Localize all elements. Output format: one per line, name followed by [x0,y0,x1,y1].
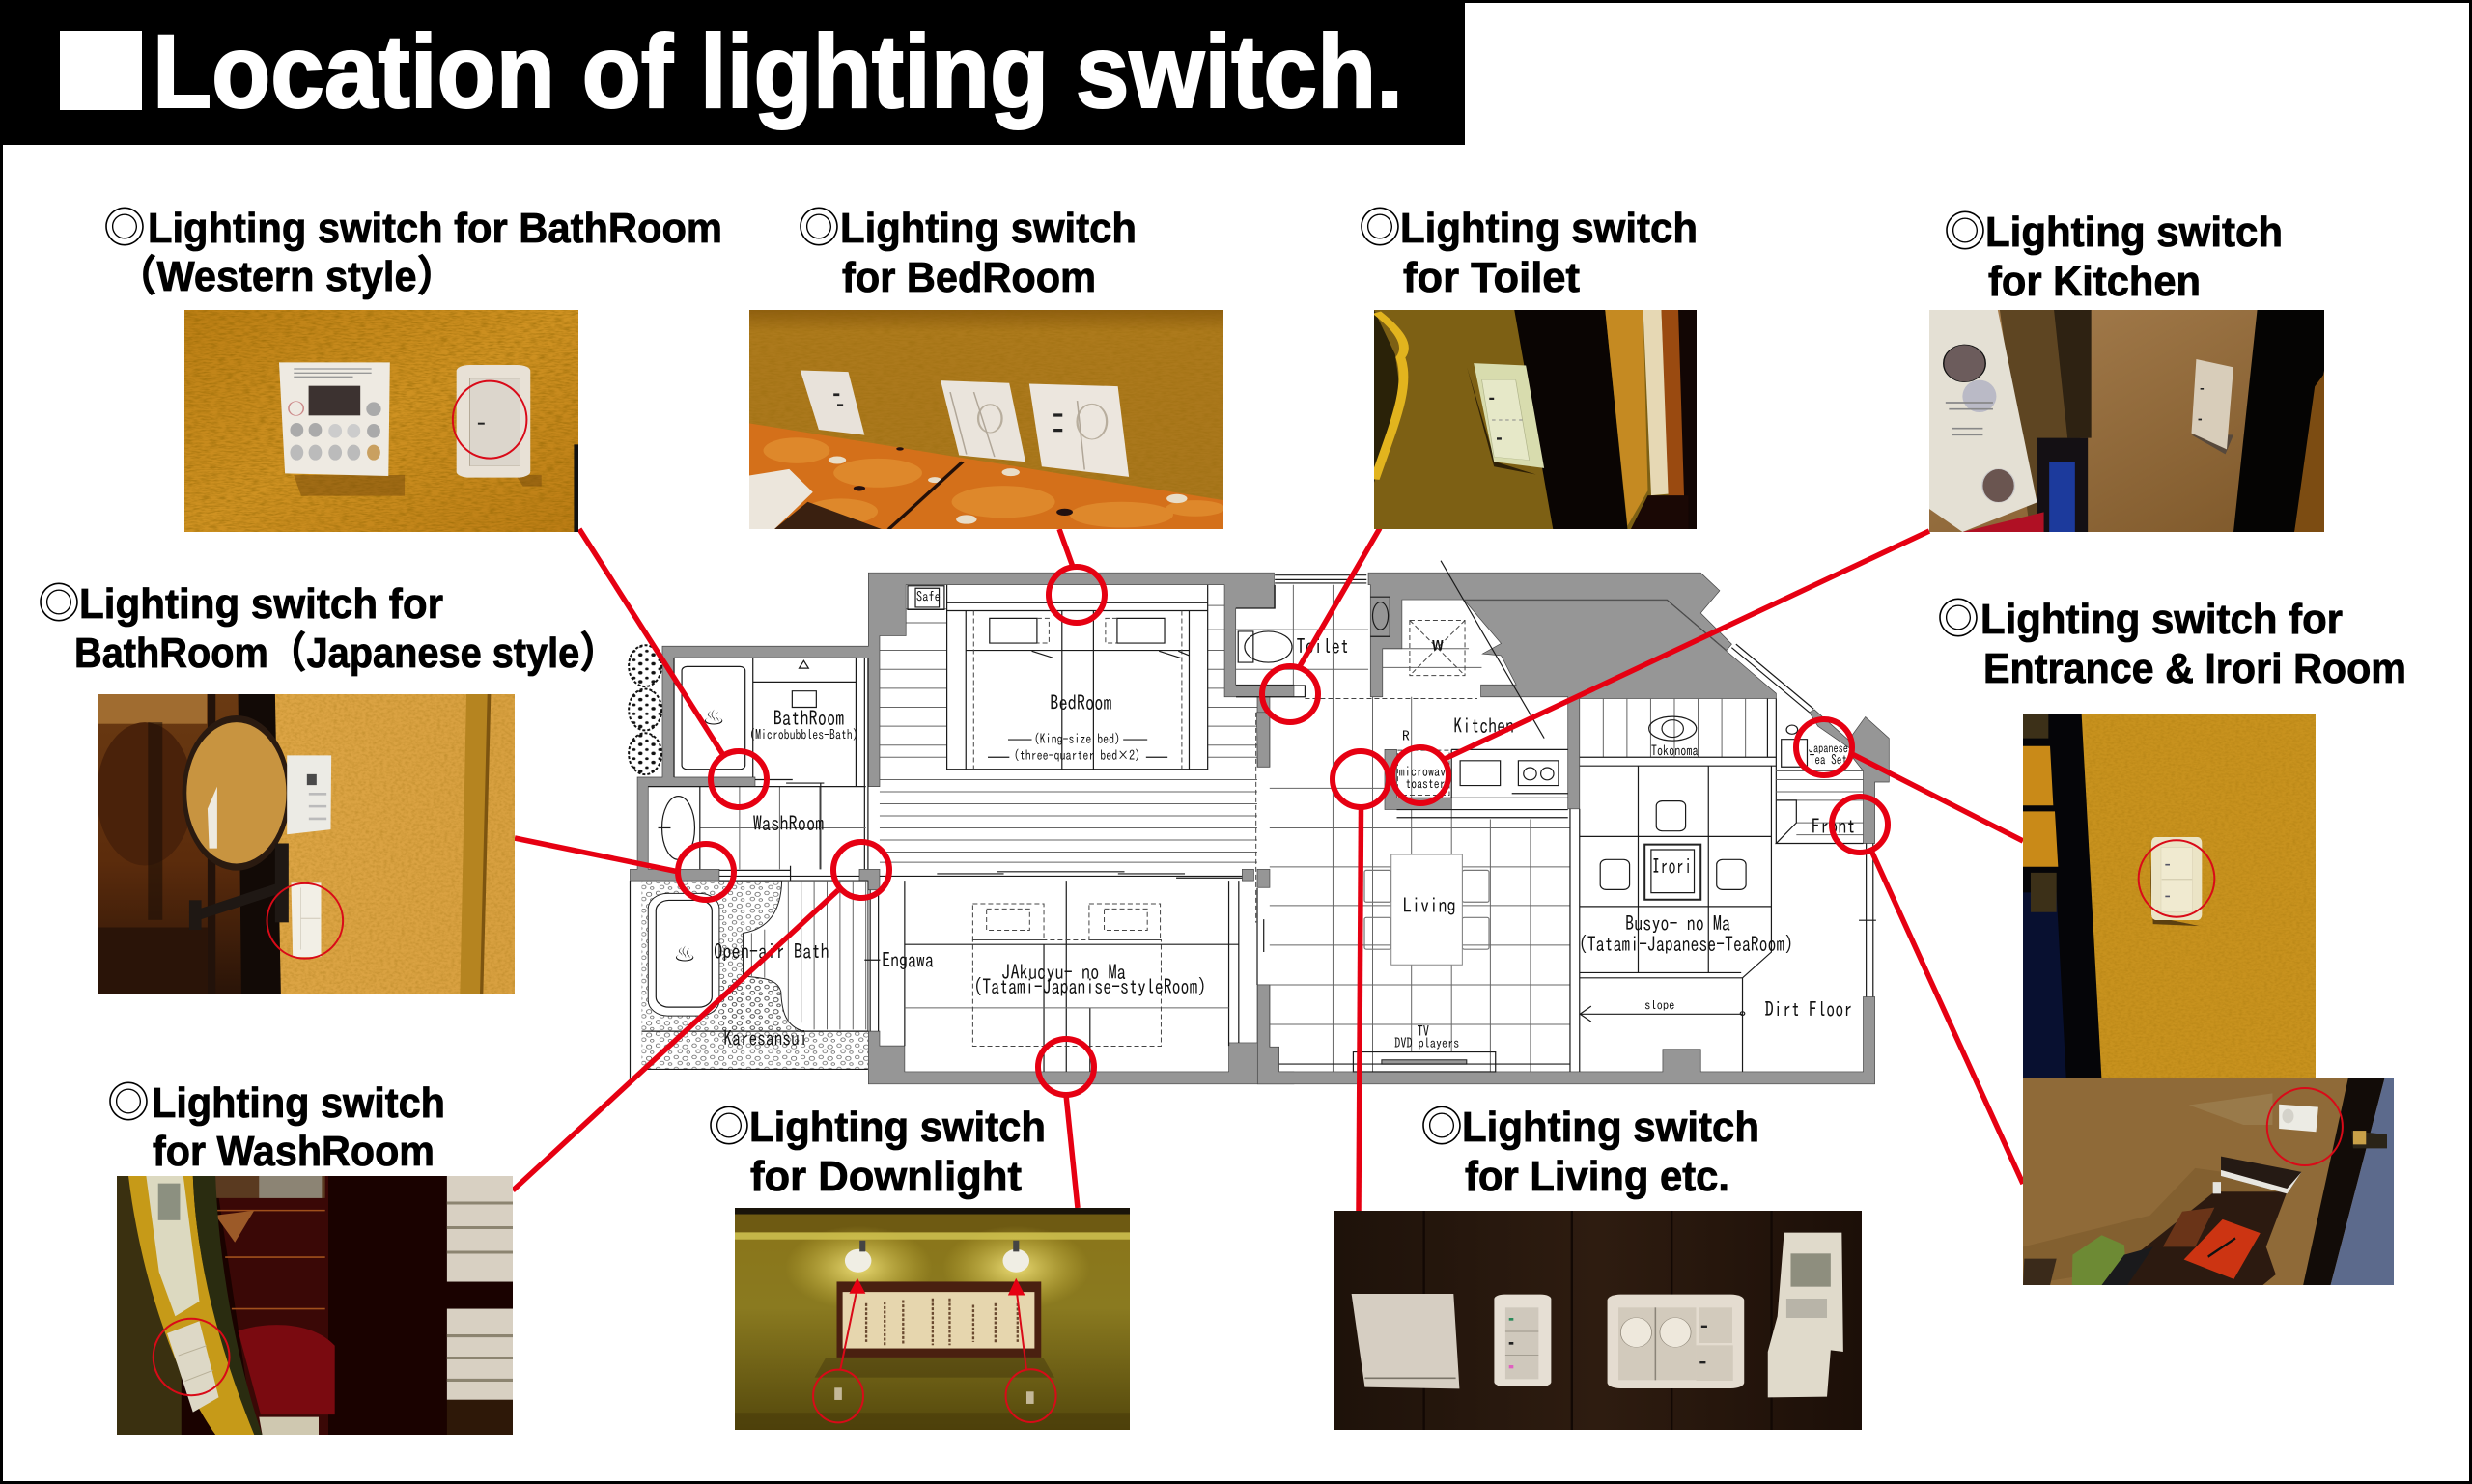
photo: bathroom western switch [184,310,578,532]
toilet room [1236,585,1477,699]
bedroom furniture [908,585,1208,770]
heading: bathroom western [103,193,722,300]
photo: toilet switch [1374,310,1697,529]
tea room: Irori [1652,855,1692,877]
red callout lines [513,528,2023,1211]
bedroom labels: (King-size bed) [1034,732,1120,745]
heading: kitchen: for Kitchen [1988,258,2201,305]
heading: toilet [1359,193,1698,301]
heading: washroom: Lighting switch [152,1079,445,1127]
TV stand: TV [1417,1023,1429,1038]
heading: living [1420,1092,1759,1200]
heading: bathroom japanese: Lighting switch for [79,580,443,628]
bathroom [674,658,868,869]
kitchen: toaster [1405,776,1446,790]
wooden shelf [2023,1157,2302,1285]
heading: living: Lighting switch [1462,1104,1759,1151]
triple switch [1494,1295,1551,1386]
engawa [864,890,934,1031]
kitchen: microwave [1399,765,1451,778]
bathroom: (Microbubbles-Bath) [749,727,858,741]
floor plan [629,561,1889,1084]
red arrows and circles [813,1278,1056,1422]
wall switch [2191,359,2233,454]
controller [287,755,331,834]
open-air bath: Open-air Bath [714,941,829,962]
heading: entrance and irori: ◎ [1937,584,1980,646]
washroom: WashRoom [753,813,824,833]
window strip [1275,575,1813,713]
heading: bedroom: Lighting switch [840,205,1137,252]
curved mirror frame [128,1176,319,1435]
tea room: Tokonoma [1651,743,1699,757]
photo: kitchen switch [1929,310,2324,532]
heading: bedroom: ◎ [798,193,840,255]
lamp glows [785,1226,1090,1309]
washroom [648,787,866,869]
dining table and chairs [1364,854,1489,965]
wall switch [292,882,321,957]
appliance panel [1929,310,2037,532]
dark door frame [2023,714,2101,1078]
heading: bathroom japanese: ◎ [38,569,80,630]
wall lamps [845,1241,1029,1273]
heading: washroom: ◎ [107,1068,150,1130]
title banner: Location of lighting switch. [153,13,1403,129]
wall switch [457,365,530,478]
patterned headboard [749,423,1225,529]
photo: bedroom switches [749,310,1223,529]
heading: bedroom [798,193,1137,301]
air conditioner remote [1768,1233,1843,1397]
towels on shelf [447,1176,513,1435]
three wall switches [801,370,1129,477]
tissue paper [749,469,813,529]
bedroom labels: Safe [916,589,941,602]
photo: washroom switch [117,1176,513,1435]
open-air bath: ♨ [673,941,696,966]
entrance and dirt floor: Japanese [1809,742,1848,754]
red location circles on plan [678,567,1888,1095]
heading: kitchen: Lighting switch [1985,209,2283,256]
floor plan: west half [629,573,1294,1084]
wall switch [2149,837,2202,926]
door frame and blue wall [2303,1078,2394,1285]
heading: washroom [107,1068,445,1175]
heading: downlight: ◎ [708,1092,750,1154]
heading: kitchen: ◎ [1944,197,1986,259]
heading: entrance and irori: Lighting switch for [1980,596,2343,643]
green bag [2072,1235,2126,1285]
bathroom: ♨ [702,705,725,730]
open-air bath: Karesansui [723,1028,807,1049]
heading: downlight: Lighting switch [749,1104,1046,1151]
bedroom labels [916,589,1167,762]
heading: entrance and irori [1937,584,2406,692]
wall switch [1467,363,1544,474]
heading: bathroom western: （Western style） [117,253,457,300]
heading: toilet: Lighting switch [1400,205,1698,252]
heading: living: ◎ [1420,1092,1463,1154]
blank plate [1352,1294,1459,1388]
kitchen [1397,715,1568,818]
engawa: Engawa [882,950,934,970]
kitchen: R [1402,729,1410,742]
small switches [834,1387,1034,1404]
sliding door tracks [719,866,1242,886]
dining table and chairs: Living [1403,895,1456,915]
photo: bathroom japanese switch [98,694,515,994]
red folder [2184,1219,2261,1279]
TV stand: DVD players [1394,1036,1459,1050]
heading: toilet: for Toilet [1403,254,1580,301]
TV stand [1353,1023,1496,1072]
dimmer plate [1608,1295,1744,1388]
remote control [146,1176,199,1316]
heading: bathroom western: Lighting switch for BathRoom [148,205,722,252]
bedroom labels: (three-quarter bed×2) [1014,748,1140,762]
heading: toilet: ◎ [1359,193,1401,255]
W closet [1410,561,1544,739]
photo: entrance switch [2023,714,2316,1078]
entrance and dirt floor: Front [1812,816,1855,836]
photo: tea set shelf switch [2023,1078,2394,1285]
garden shrubs [629,645,661,774]
heading: downlight [708,1092,1046,1200]
bath controller [279,362,390,476]
heading: kitchen [1944,197,2283,305]
heading: downlight: for Downlight [750,1153,1022,1200]
heading: bathroom western: ◎ [103,193,146,255]
floor plan: east half [1236,561,1889,1084]
heading: bathroom japanese [38,569,618,677]
heading: living: for Living etc. [1465,1153,1729,1200]
heading: bedroom: for BedRoom [842,254,1096,301]
tea room [1579,699,1793,1072]
entrance and dirt floor: Tea Set [1810,752,1847,766]
bathroom: BathRoom [773,708,844,728]
heading: entrance and irori: Entrance & Irori Room [1983,645,2406,692]
framed calligraphy [815,1281,1054,1378]
W closet: W [1432,638,1444,654]
open-air bath [630,881,868,1084]
Jakucyu room: (Tatami-Japanise-styleRoom) [973,976,1206,996]
glass door [97,694,281,994]
tea room: Busyo- no Ma [1625,912,1730,934]
entrance and dirt floor: Dirt Floor [1765,999,1852,1020]
Jakucyu room: JAkucyu- no Ma [1001,962,1126,982]
magnifying mirror [184,719,289,930]
wall switch [167,1321,219,1413]
Jakucyu room [905,881,1239,1072]
heading: bathroom japanese: BathRoom（Japanese style） [74,630,618,677]
tea room: (Tatami-Japanese-TeaRoom) [1579,934,1793,954]
toilet room: Toilet [1296,636,1349,657]
entrance and dirt floor [1580,725,1876,1022]
photo: living switches [1334,1211,1862,1430]
kitchen: Kitchen [1453,715,1514,736]
bedroom labels: BedRoom [1050,692,1112,713]
wall switch [2279,1105,2318,1132]
photo: downlight switches [735,1208,1130,1430]
entrance and dirt floor: slope [1644,998,1674,1011]
heading: washroom: for WashRoom [153,1128,435,1175]
